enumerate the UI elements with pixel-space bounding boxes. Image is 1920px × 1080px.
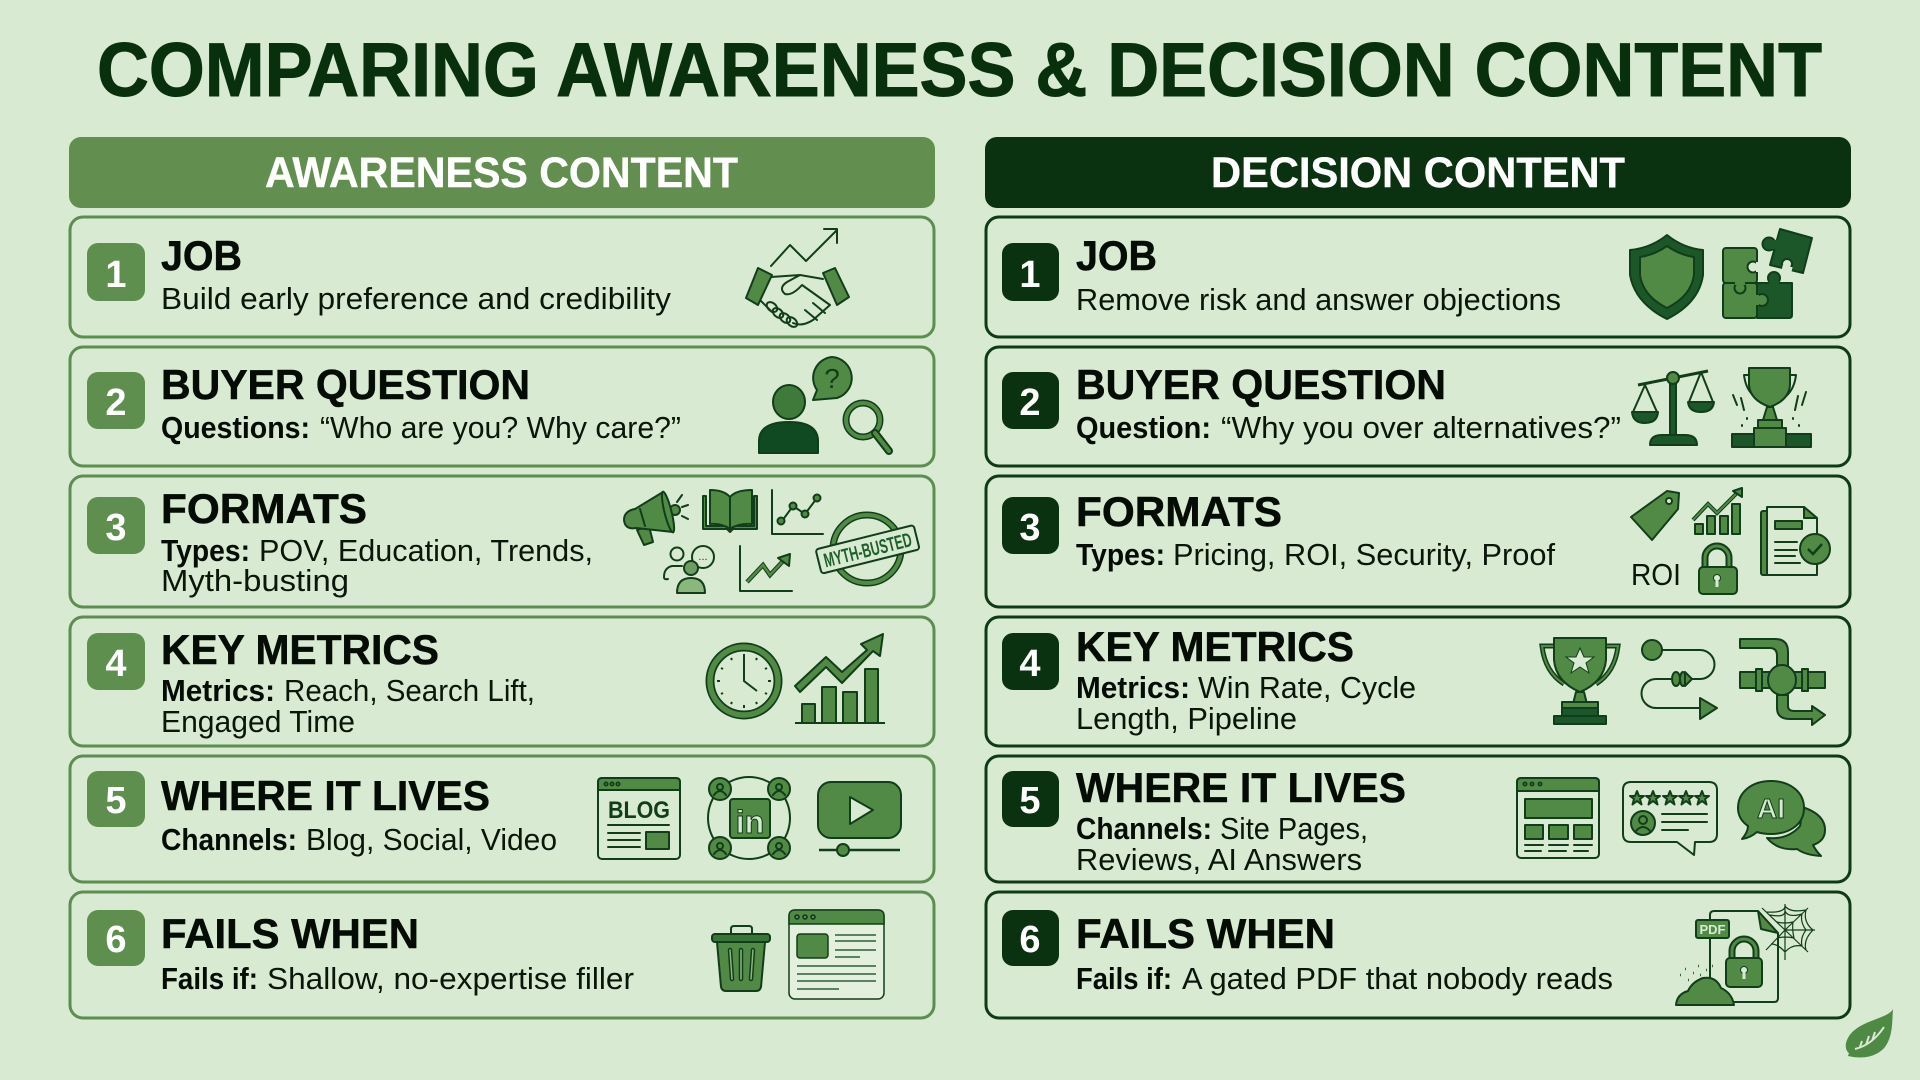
icon: video player xyxy=(818,782,901,856)
icon: linkedin network: in xyxy=(736,804,764,840)
number badge 1 xyxy=(1002,243,1059,301)
icon: verified document xyxy=(1761,507,1830,575)
awareness row 2: buyer question xyxy=(70,347,934,466)
where it lives text xyxy=(161,822,557,857)
awareness row 1: job xyxy=(70,217,934,337)
number badge 4 xyxy=(1002,633,1059,690)
icon: myth-busted stamp xyxy=(816,515,920,583)
where it lives text: Reviews, AI Answers xyxy=(1076,842,1362,877)
heading: where it lives: WHERE IT LIVES xyxy=(161,772,490,819)
icon: dusty gated pdf xyxy=(1676,904,1815,1005)
icon: trophy on podium xyxy=(1732,368,1811,447)
decision row 3: formats xyxy=(986,476,1850,607)
fails when text: Shallow, no-expertise filler xyxy=(267,961,634,996)
where it lives text: Channels: xyxy=(1076,811,1212,846)
icon: balance scale xyxy=(1632,371,1714,445)
heading: job: JOB xyxy=(161,232,242,279)
key metrics text: Engaged Time xyxy=(161,704,355,739)
decision row 6: fails when xyxy=(986,892,1850,1018)
number badge 2 xyxy=(1002,372,1059,429)
buyer question text: Question: xyxy=(1076,410,1211,445)
number badge 6 xyxy=(1002,910,1059,966)
decision row 4: key metrics xyxy=(986,617,1850,746)
heading: where it lives: WHERE IT LIVES xyxy=(1076,764,1406,811)
title: COMPARING AWARENESS & DECISION CONTENT xyxy=(97,28,1822,113)
panel: decision column xyxy=(985,137,1851,1018)
number badge 4: 4 xyxy=(1019,643,1041,685)
number badge 1: 1 xyxy=(1019,254,1041,296)
icon: trash can xyxy=(712,926,770,991)
job description: Remove risk and answer objections xyxy=(1076,282,1561,317)
roi label: ROI xyxy=(1631,557,1681,592)
fails when text: A gated PDF that nobody reads xyxy=(1182,961,1613,996)
icon: leaf logo xyxy=(1846,1009,1893,1057)
icon: clock xyxy=(710,647,778,715)
number badge 1: 1 xyxy=(105,254,127,296)
job description: Build early preference and credibility xyxy=(161,281,671,316)
heading: formats: FORMATS xyxy=(1076,488,1282,535)
icon: bar chart with arrow xyxy=(795,634,885,723)
decision row 5: where it lives xyxy=(986,756,1850,882)
icon: myth-busted stamp: MYTH-BUSTED xyxy=(822,529,914,572)
formats text: POV, Education, Trends, xyxy=(259,533,593,568)
icon: line chart trends xyxy=(772,490,823,534)
where it lives text: Channels: xyxy=(161,822,297,857)
where it lives text xyxy=(1076,811,1368,877)
fails when text: Fails if: xyxy=(161,961,258,996)
awareness header: AWARENESS CONTENT xyxy=(265,149,738,197)
heading: fails when: FAILS WHEN xyxy=(1076,910,1335,957)
awareness row 4: key metrics xyxy=(70,617,934,746)
number badge 6 xyxy=(87,910,145,966)
icon: review bubble xyxy=(1623,782,1717,855)
icon: shield xyxy=(1630,235,1703,319)
icon: linkedin network xyxy=(708,777,790,859)
icon: rising chart xyxy=(740,546,792,591)
icon: ai chat bubbles xyxy=(1738,781,1825,856)
key metrics text xyxy=(161,673,535,739)
heading: key metrics: KEY METRICS xyxy=(1076,623,1354,670)
buyer question text: Questions: xyxy=(161,410,310,445)
number badge 4: 4 xyxy=(105,643,127,685)
key metrics text: Win Rate, Cycle xyxy=(1198,670,1416,705)
decision header xyxy=(985,137,1851,208)
icon: blog window xyxy=(598,778,680,859)
number badge 2 xyxy=(87,372,145,429)
awareness header xyxy=(69,137,935,208)
number badge 3: 3 xyxy=(1019,507,1041,549)
icon: web page article xyxy=(789,910,884,999)
number badge 2: 2 xyxy=(105,382,127,424)
number badge 2: 2 xyxy=(1019,382,1041,424)
buyer question text: “Who are you? Why care?” xyxy=(320,410,681,445)
icon: trophy with star xyxy=(1542,638,1618,724)
number badge 5: 5 xyxy=(1019,780,1041,822)
number badge 6: 6 xyxy=(105,919,127,961)
key metrics text: Metrics: xyxy=(1076,670,1190,705)
icon: dusty gated pdf: PDF xyxy=(1700,922,1726,937)
heading: key metrics: KEY METRICS xyxy=(161,626,439,673)
formats text: Myth-busting xyxy=(161,563,349,598)
buyer question text xyxy=(161,410,681,445)
icon: blog window: BLOG xyxy=(608,797,670,824)
awareness row 5: where it lives xyxy=(70,756,934,882)
icon: audience with speech bubble xyxy=(664,546,714,593)
heading: formats: FORMATS xyxy=(161,485,367,532)
icon: ai chat bubbles: AI xyxy=(1757,793,1785,824)
icon: winding route xyxy=(1642,640,1717,719)
awareness row 3: formats xyxy=(70,476,934,607)
number badge 4 xyxy=(87,633,145,690)
icon: person with question and magnifier xyxy=(759,357,889,453)
icon: site page window xyxy=(1517,778,1599,858)
icon: puzzle pieces xyxy=(1723,229,1812,318)
panel: awareness column xyxy=(69,137,935,1018)
number badge 5 xyxy=(87,771,145,827)
number badge 3 xyxy=(87,497,145,554)
icon: pipeline valve xyxy=(1740,639,1825,725)
number badge 5 xyxy=(1002,771,1059,827)
icon: megaphone xyxy=(624,491,688,545)
awareness row 6: fails when xyxy=(70,892,934,1018)
key metrics text: Reach, Search Lift, xyxy=(284,673,535,708)
fails when text: Fails if: xyxy=(1076,961,1172,996)
icon: open book xyxy=(703,490,757,532)
key metrics text: Length, Pipeline xyxy=(1076,701,1297,736)
formats text xyxy=(161,533,593,598)
formats text: Pricing, ROI, Security, Proof xyxy=(1173,537,1555,572)
number badge 3 xyxy=(1002,497,1059,554)
number badge 3: 3 xyxy=(105,507,127,549)
formats text: Types: xyxy=(1076,537,1165,572)
decision row 1: job xyxy=(986,217,1850,337)
decision header: DECISION CONTENT xyxy=(1211,149,1625,197)
number badge 1 xyxy=(87,243,145,301)
number badge 5: 5 xyxy=(105,780,127,822)
icon: audience with speech bubble: ... xyxy=(698,551,708,563)
decision row 2: buyer question xyxy=(986,347,1850,466)
heading: buyer question: BUYER QUESTION xyxy=(161,361,530,408)
icon: handshake with growth arrow xyxy=(746,229,849,329)
heading: fails when: FAILS WHEN xyxy=(161,910,419,957)
where it lives text: Blog, Social, Video xyxy=(306,822,557,857)
icon: person with question and magnifier: ? xyxy=(824,363,840,394)
key metrics text: Metrics: xyxy=(161,673,275,708)
heading: buyer question: BUYER QUESTION xyxy=(1076,361,1446,408)
icon: roi chart xyxy=(1693,488,1742,534)
icon: padlock xyxy=(1699,546,1737,594)
icon: price tag xyxy=(1631,491,1679,540)
icon: cobweb xyxy=(1762,904,1815,960)
where it lives text: Site Pages, xyxy=(1220,811,1368,846)
formats text: Types: xyxy=(161,533,250,568)
number badge 6: 6 xyxy=(1019,919,1041,961)
key metrics text xyxy=(1076,670,1416,736)
buyer question text: “Why you over alternatives?” xyxy=(1221,410,1621,445)
heading: job: JOB xyxy=(1076,232,1157,279)
